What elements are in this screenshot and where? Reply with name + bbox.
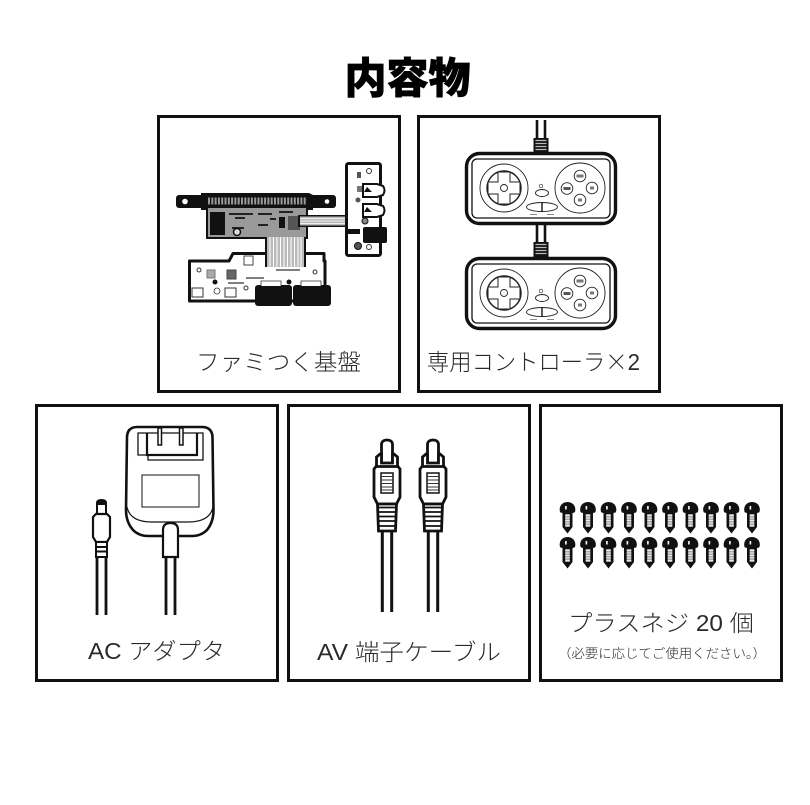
icon: screws row 2 (560, 537, 760, 568)
right side board (346, 164, 387, 256)
bottom board (190, 237, 331, 306)
icon: AC adapter (93, 427, 214, 615)
icon: RCA plug right (420, 440, 446, 612)
icon: screws row 1 (560, 502, 760, 534)
panel: AV端子ケーブル (288, 406, 530, 680)
icon: controller 1 (466, 120, 616, 224)
label: AV端子ケーブル: AV 端子ケーブル (317, 639, 501, 665)
note: 必要に応じて: （必要に応じてご使用ください。） (558, 646, 766, 661)
label: 専用コントローラ×2: 専用コントローラ×2 (427, 343, 640, 377)
label: プラスネジ20個: プラスネジ 20 個 (568, 610, 754, 636)
label: ACアダプタ: AC アダプタ (88, 638, 225, 664)
title: 内容物 (344, 55, 470, 102)
panel: プラスネジ (540, 406, 782, 680)
panel: ACアダプタ (36, 406, 278, 680)
panel: 専用コントローラ×2 (418, 116, 660, 392)
label: ファミつく基盤: ファミつく基盤 (196, 349, 361, 375)
icon: RCA plug left (374, 440, 400, 612)
icon: circuit board (176, 164, 387, 306)
icon: controller 2 (466, 224, 616, 328)
panel: ファミつく基盤 (158, 116, 400, 392)
